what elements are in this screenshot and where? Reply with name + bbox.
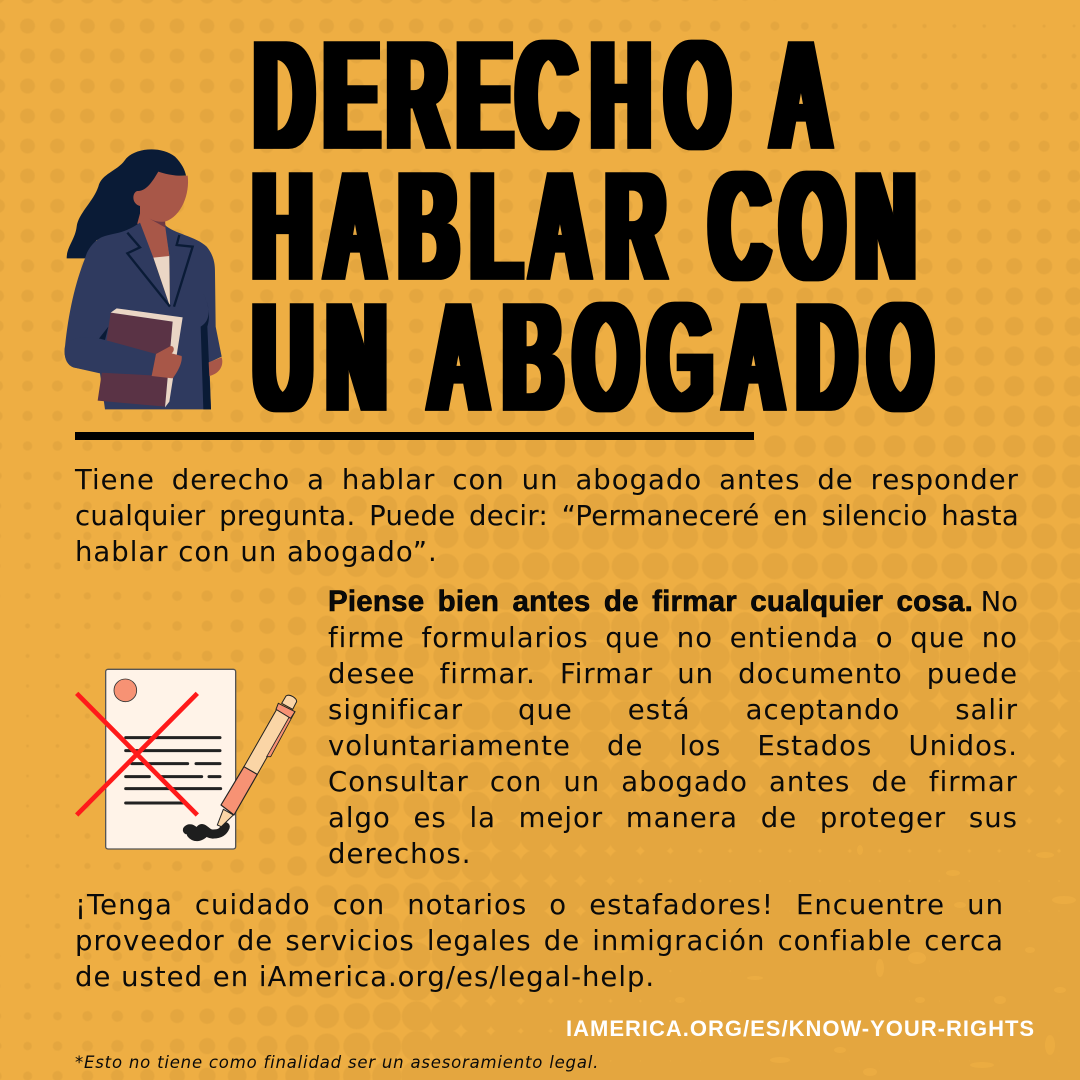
text block: think before signing	[328, 585, 1018, 870]
text block: beware of scammers: ¡Tenga cuidado con notarios o estafadores! Encuentre un	[75, 889, 1004, 921]
text block: think before signing: Consultar con un abogado antes de firmar	[328, 766, 1018, 798]
text block: think before signing: Piense bien antes de firmar cualquier cosa.	[328, 585, 973, 618]
text block: right to a lawyer: cualquier pregunta. Puede decir: “Permaneceré en silencio hasta	[75, 500, 1019, 532]
website link: IAMERICA.ORG/ES/KNOW-YOUR-RIGHTS	[566, 1016, 1035, 1041]
text block: think before signing: desee firmar. Firmar un documento puede	[328, 658, 1018, 690]
text block: think before signing: No	[981, 586, 1018, 618]
legal disclaimer: *Esto no tiene como finalidad ser un asesoramiento legal.	[75, 1053, 599, 1072]
title: HABLAR CON	[253, 141, 915, 313]
title: UN ABOGADO	[253, 272, 932, 444]
text block: beware of scammers	[75, 889, 1004, 993]
text block: right to a lawyer: hablar con un abogado”.	[75, 536, 438, 568]
text block: right to a lawyer: Tiene derecho a hablar con un abogado antes de responder	[75, 464, 1019, 496]
text block: think before signing: algo es la mejor manera de proteger sus	[328, 802, 1018, 834]
text block: right to a lawyer	[74, 464, 1019, 568]
text block: think before signing: voluntariamente de los Estados Unidos.	[328, 730, 1018, 762]
divider bar under title	[75, 432, 754, 440]
title: DERECHO A	[254, 10, 831, 182]
text block: beware of scammers: proveedor de servicios legales de inmigración confiable cerca	[75, 925, 1004, 957]
text block: think before signing: derechos.	[328, 838, 471, 870]
text block: beware of scammers: de usted en iAmerica.org/es/legal-help.	[75, 961, 655, 993]
text block: think before signing: firme formularios que no entienda o que no	[328, 622, 1018, 654]
text block: think before signing: significar que está aceptando salir	[328, 694, 1018, 726]
